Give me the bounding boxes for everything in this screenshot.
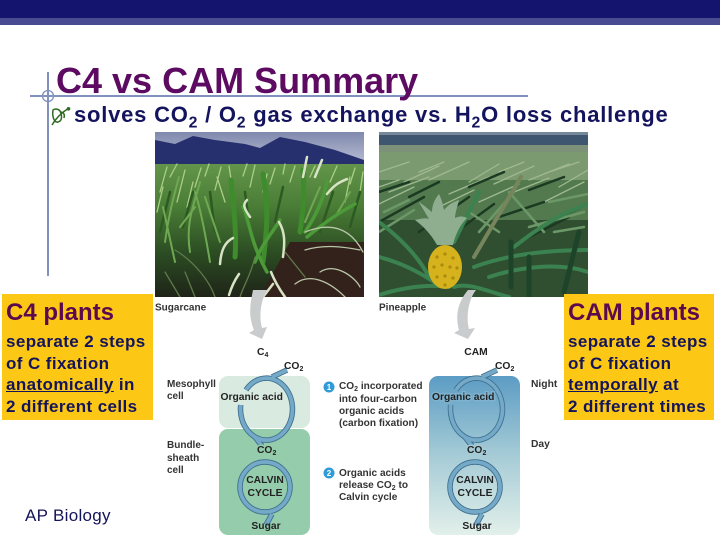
text: CAM description [568,332,708,416]
step 1 and 2 captions: into four-carbon [339,394,417,405]
CAM diagram: 2 [510,366,514,373]
C4 diagram [167,347,310,535]
panel: diagram [155,290,558,535]
C4 diagram: CALVIN [246,475,284,486]
plant labels: Sugarcane [155,302,207,314]
heading: C4 plants: C4 plants [6,299,114,326]
panel: C4 plants [2,294,153,420]
step 1 and 2 captions: incorporated [358,381,423,392]
CAM diagram: Organic acid [432,392,494,403]
step 1 and 2 captions: (carbon fixation) [339,418,418,429]
step 1 and 2 captions: 2 [392,485,396,492]
text: CAM description: separate 2 steps [568,332,708,351]
CAM diagram: CO [495,361,510,372]
step 1 and 2 captions: 1 [327,383,332,392]
plant labels [155,302,427,314]
step 1 and 2 captions: release CO [339,480,392,491]
pineapple crown [415,194,467,245]
top banner [0,0,720,25]
text: C4 description: 2 different cells [6,396,138,416]
C4 diagram: CO [257,445,272,456]
C4 diagram: 2 [272,450,276,457]
CAM diagram: CAM [464,347,488,358]
heading: CAM plants: CAM plants [568,299,700,326]
C4 diagram: Organic acid [220,392,283,403]
photo: sugarcane [155,132,364,297]
C4 diagram: CO [284,361,299,372]
text: C4 description: anatomically in [6,375,135,394]
CAM diagram: CALVIN [456,475,494,486]
C4 diagram: 2 [299,366,303,373]
C4 diagram: Sugar [251,521,281,532]
CAM diagram [429,347,558,535]
CAM diagram: 2 [482,450,486,457]
C4 diagram: Bundle- [167,440,204,451]
step 1 and 2 captions: CO [339,381,354,392]
title crosshair ornament [30,72,528,276]
C4 diagram: sheath [167,453,199,464]
step 1 and 2 captions: 2 [354,386,358,393]
C4 diagram: CYCLE [248,488,283,499]
step 1 and 2 captions [324,381,423,503]
pineapple fruit [428,245,462,289]
step 1 and 2 captions: 2 [327,469,332,478]
panel: CAM plants [564,294,714,420]
step 1 and 2 captions: organic acids [339,406,404,417]
text: C4 description: of C fixation [6,354,109,372]
text: CAM description: 2 different times [568,396,706,416]
text: CAM description: of C fixation [568,354,671,372]
title: C4 vs CAM Summary [56,60,418,101]
arrows: photo to diagram [249,290,476,339]
step 1 and 2 captions: Calvin cycle [339,492,398,503]
footer label: AP Biology [25,506,111,525]
CAM diagram: CYCLE [458,488,493,499]
CAM diagram: Night [531,379,558,390]
C4 diagram: C [257,347,264,358]
CAM diagram: Sugar [462,521,492,532]
text: CAM description: temporally at [568,375,679,394]
C4 diagram: cell [167,391,184,402]
step 1 and 2 captions: to [396,480,408,491]
C4 diagram: cell [167,465,184,476]
plant labels: Pineapple [379,302,427,314]
photo: pineapple [379,132,588,297]
icon: leaf bullet [51,107,70,126]
C4 diagram: 4 [264,352,268,359]
subtitle: solves CO2 / O2 gas exchange vs. H2O loss challenge [74,102,668,131]
CAM diagram: Day [531,439,550,450]
text: C4 description [6,332,146,416]
step 1 and 2 captions: Organic acids [339,468,406,479]
CAM diagram: CO [467,445,482,456]
text: C4 description: separate 2 steps [6,332,146,351]
C4 diagram: Mesophyll [167,379,216,390]
